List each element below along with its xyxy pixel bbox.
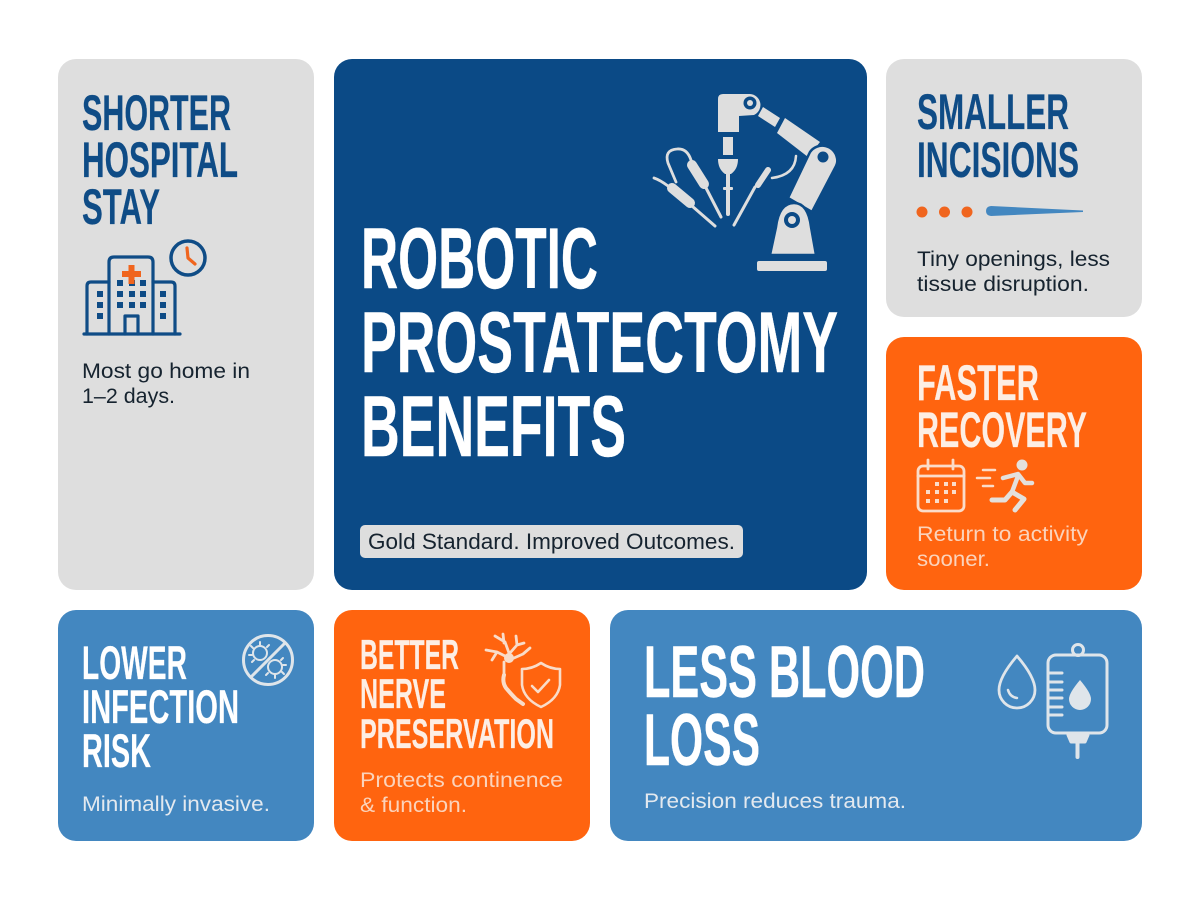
heading: lower infection risk: RISK <box>82 724 151 777</box>
text: return to activity: sooner. <box>917 547 990 571</box>
text: protects continence <box>360 768 563 817</box>
heading: shorter hospital stay: STAY <box>82 179 160 235</box>
heading: less blood loss: LESS BLOOD <box>644 632 925 713</box>
heading: lower infection risk: LOWER <box>82 636 187 689</box>
panel: faster recovery <box>886 337 1142 590</box>
title: ROBOTIC <box>361 211 598 307</box>
text: tiny openings <box>917 247 1110 296</box>
heading: lower infection risk <box>82 636 239 777</box>
heading: smaller incisions: SMALLER <box>917 84 1069 140</box>
text: protects continence: & function. <box>360 793 467 817</box>
heading: shorter hospital stay: HOSPITAL <box>82 132 238 188</box>
heading: better nerve preservation: BETTER <box>360 631 459 678</box>
heading: shorter hospital stay: SHORTER <box>82 85 231 141</box>
panel: better nerve preservation <box>334 610 590 841</box>
icon: incision dots <box>916 206 972 218</box>
panel: lower infection risk <box>58 610 314 841</box>
text: minimally invasive: Minimally invasive. <box>82 792 270 816</box>
title: BENEFITS <box>361 379 626 475</box>
panel: less blood loss <box>610 610 1142 841</box>
heading: better nerve preservation <box>360 631 554 757</box>
text: return to activity: Return to activity <box>917 522 1088 546</box>
icon: calendar <box>918 460 964 511</box>
text: most go home: 1–2 days. <box>82 384 175 408</box>
heading: less blood loss <box>644 632 925 781</box>
icon: neuron <box>486 634 530 704</box>
text: most go home: Most go home in <box>82 359 250 383</box>
heading: faster recovery: RECOVERY <box>917 402 1087 458</box>
heading: better nerve preservation: PRESERVATION <box>360 710 554 757</box>
heading: shorter hospital stay <box>82 85 238 235</box>
tagline pill: Gold Standard. Improved Outcomes. <box>368 529 735 554</box>
text: tiny openings: tissue disruption. <box>917 272 1089 296</box>
heading: faster recovery: FASTER <box>917 355 1039 411</box>
title: PROSTATECTOMY <box>361 295 838 391</box>
icon: surgical robot <box>718 94 837 271</box>
title <box>361 211 838 475</box>
icon: scalpel blade <box>986 206 1083 216</box>
heading: smaller incisions <box>917 84 1079 188</box>
heading: better nerve preservation: NERVE <box>360 670 446 717</box>
icon: shield with check <box>522 663 560 707</box>
icon: no germs <box>244 636 292 684</box>
icon: surgical tools <box>654 149 796 226</box>
heading: smaller incisions: INCISIONS <box>917 132 1079 188</box>
text: most go home <box>82 359 250 408</box>
text: precision reduces trauma: Precision reduces trauma. <box>644 789 906 813</box>
text: tiny openings: Tiny openings, less <box>917 247 1110 271</box>
text: return to activity <box>917 522 1088 571</box>
panel: hero title <box>334 59 867 590</box>
heading: faster recovery <box>917 355 1087 458</box>
icon: iv bag <box>1048 644 1107 757</box>
icon: blood drop <box>999 656 1035 708</box>
icon: hospital with clock <box>84 241 205 334</box>
heading: lower infection risk: INFECTION <box>82 680 239 733</box>
icon: runner <box>977 460 1032 510</box>
panel: shorter hospital stay <box>58 59 314 590</box>
panel: smaller incisions <box>886 59 1142 317</box>
heading: less blood loss: LOSS <box>644 700 760 781</box>
text: protects continence: Protects continence <box>360 768 563 792</box>
